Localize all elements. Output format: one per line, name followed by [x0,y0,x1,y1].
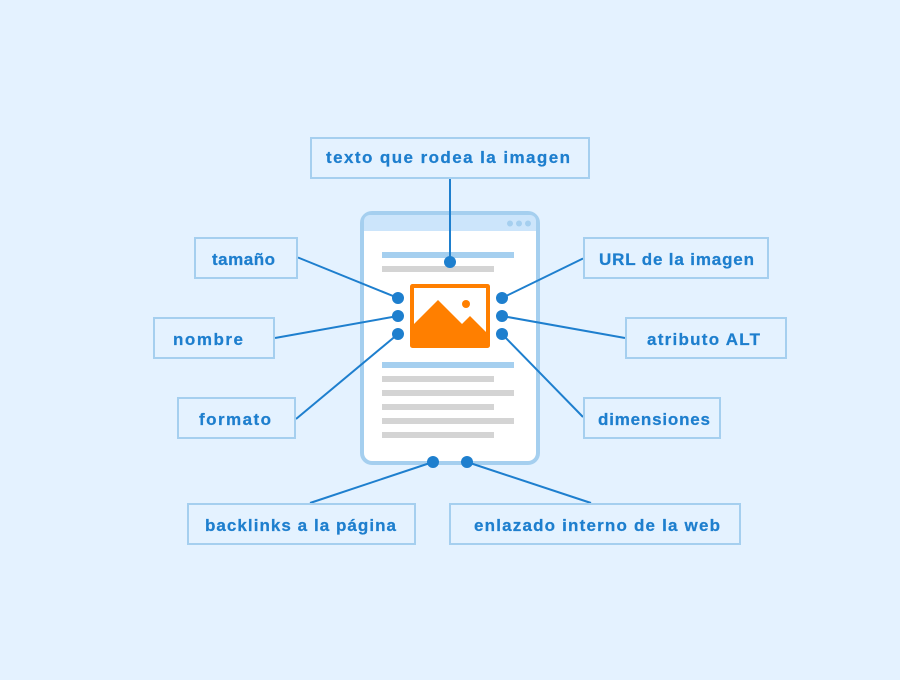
label: URL de la imagen: URL de la imagen [599,250,754,269]
connector: enlazado interno de la web [461,456,591,503]
label: backlinks a la página [188,504,415,544]
text lines above image [382,252,514,272]
label: dimensiones [584,398,720,438]
connector: nombre [275,310,404,338]
panel: document page [362,213,538,463]
connector: formato [296,328,404,419]
label: nombre [154,318,274,358]
label: enlazado interno de la web: enlazado interno de la web [474,516,720,535]
connector: URL de la imagen [496,258,583,304]
label: dimensiones: dimensiones [598,410,710,429]
label: nombre: nombre [173,330,243,349]
label: atributo ALT [626,318,786,358]
label: enlazado interno de la web [450,504,740,544]
label: formato: formato [199,410,271,429]
connector: backlinks a la página [310,456,439,503]
connector: atributo ALT [496,310,625,338]
label: texto que rodea la imagen: texto que rodea la imagen [326,148,570,167]
text lines below image [382,362,514,438]
connector: tamaño [298,258,404,304]
label: texto que rodea la imagen [311,138,589,178]
label: formato [178,398,295,438]
label: backlinks a la página: backlinks a la página [205,516,397,535]
label: atributo ALT: atributo ALT [647,330,761,349]
connector: texto que rodea la imagen [444,179,456,268]
connector: dimensiones [496,328,583,417]
label: URL de la imagen [584,238,768,278]
label: tamaño: tamaño [212,250,275,269]
browser header bar [364,215,536,231]
icon: orange image [410,284,490,348]
label: tamaño [195,238,297,278]
